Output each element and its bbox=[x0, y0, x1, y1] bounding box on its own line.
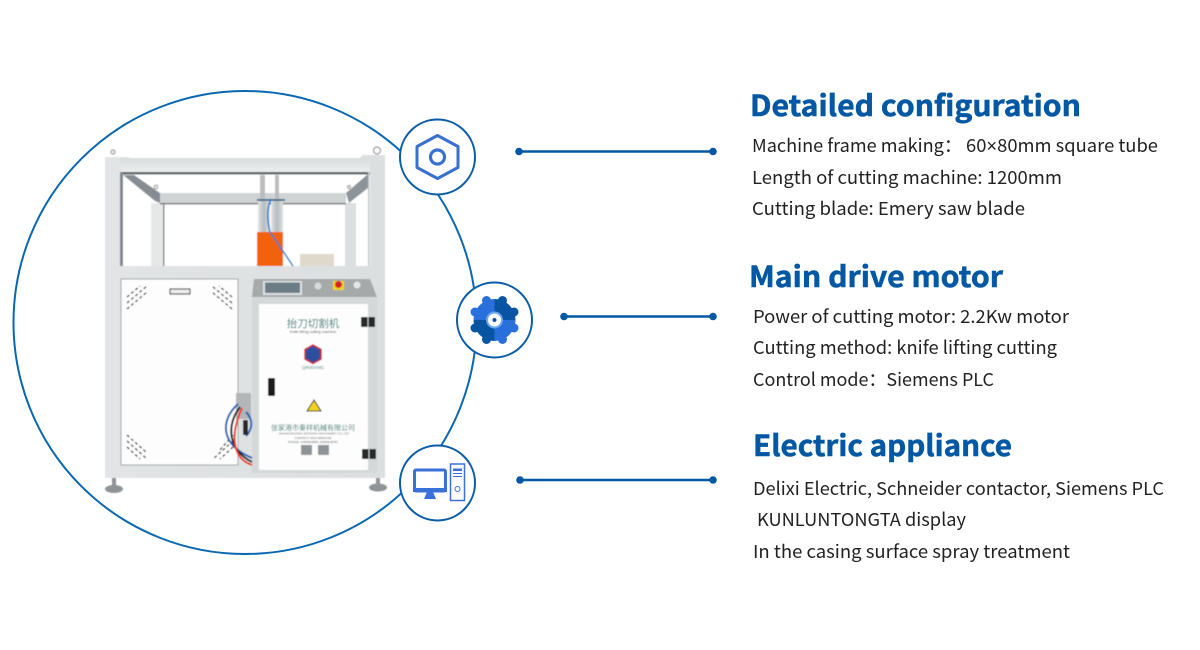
icon: puzzle gears bbox=[457, 282, 532, 358]
connector line 3 bbox=[516, 476, 717, 484]
heading: Electric appliance bbox=[753, 423, 1012, 465]
specs bbox=[752, 132, 1158, 221]
control panel bbox=[252, 279, 377, 297]
electrical cabinet door: PHONE: 15995628831 15995628781 bbox=[288, 440, 338, 444]
heading: Detailed configuration bbox=[750, 83, 1081, 125]
heading: Main drive motor bbox=[749, 254, 1003, 296]
specs: Cutting blade: Emery saw blade bbox=[752, 195, 1025, 221]
specs: Cutting method: knife lifting cutting bbox=[753, 334, 1057, 360]
icon: desktop computer bbox=[400, 446, 475, 520]
connector line 1 bbox=[515, 148, 717, 155]
handle bbox=[268, 378, 275, 396]
front frame bbox=[105, 155, 385, 478]
specs: Length of cutting machine: 1200mm bbox=[752, 164, 1062, 190]
left cabinet door bbox=[121, 279, 238, 465]
specs: Power of cutting motor: 2.2Kw motor bbox=[753, 303, 1070, 329]
specs bbox=[753, 475, 1164, 564]
section: detailed configuration bbox=[750, 83, 1158, 221]
top beam bbox=[120, 158, 370, 172]
door title: 抬刀切割机 bbox=[287, 316, 340, 331]
specs: Control mode：Siemens PLC bbox=[753, 366, 994, 392]
specs: 60×80mm square tube bbox=[966, 132, 1158, 158]
electrical cabinet door: 张家港市秦祥机械有限公司 bbox=[271, 423, 355, 433]
section: electric appliance bbox=[753, 423, 1164, 564]
electrical cabinet door: QINXIANG bbox=[302, 365, 324, 370]
specs bbox=[753, 303, 1070, 392]
lifting rings bbox=[111, 147, 380, 189]
cutting head bbox=[257, 175, 334, 266]
specs: Delixi Electric, Schneider contactor, Siemens PLC bbox=[753, 475, 1164, 501]
valve and hoses bbox=[226, 393, 252, 465]
frame opening bbox=[120, 172, 370, 266]
large outline circle bbox=[14, 91, 476, 554]
machine illustration bbox=[105, 147, 387, 493]
icon: hex nut bbox=[400, 120, 475, 194]
connector line 2 bbox=[560, 313, 717, 320]
specs: Machine frame making： bbox=[752, 132, 962, 158]
section: main drive motor bbox=[749, 254, 1070, 392]
feet bbox=[105, 478, 387, 493]
electrical cabinet door bbox=[259, 304, 368, 470]
electrical cabinet door: ZHANGJIAGANG QINXIANG MACHINERY CO.,LTD bbox=[279, 432, 350, 436]
QR codes bbox=[301, 445, 312, 455]
specs: In the casing surface spray treatment bbox=[753, 538, 1070, 564]
specs: KUNLUNTONGTA display bbox=[757, 506, 967, 532]
electrical cabinet body bbox=[252, 297, 377, 473]
hinges bbox=[361, 317, 376, 459]
logo bbox=[305, 345, 321, 364]
warning sign bbox=[307, 400, 321, 411]
electrical cabinet door: CONTACT: 0512-58361436 bbox=[295, 436, 332, 440]
electrical cabinet door: Knife lifting cutting machine bbox=[290, 330, 336, 334]
